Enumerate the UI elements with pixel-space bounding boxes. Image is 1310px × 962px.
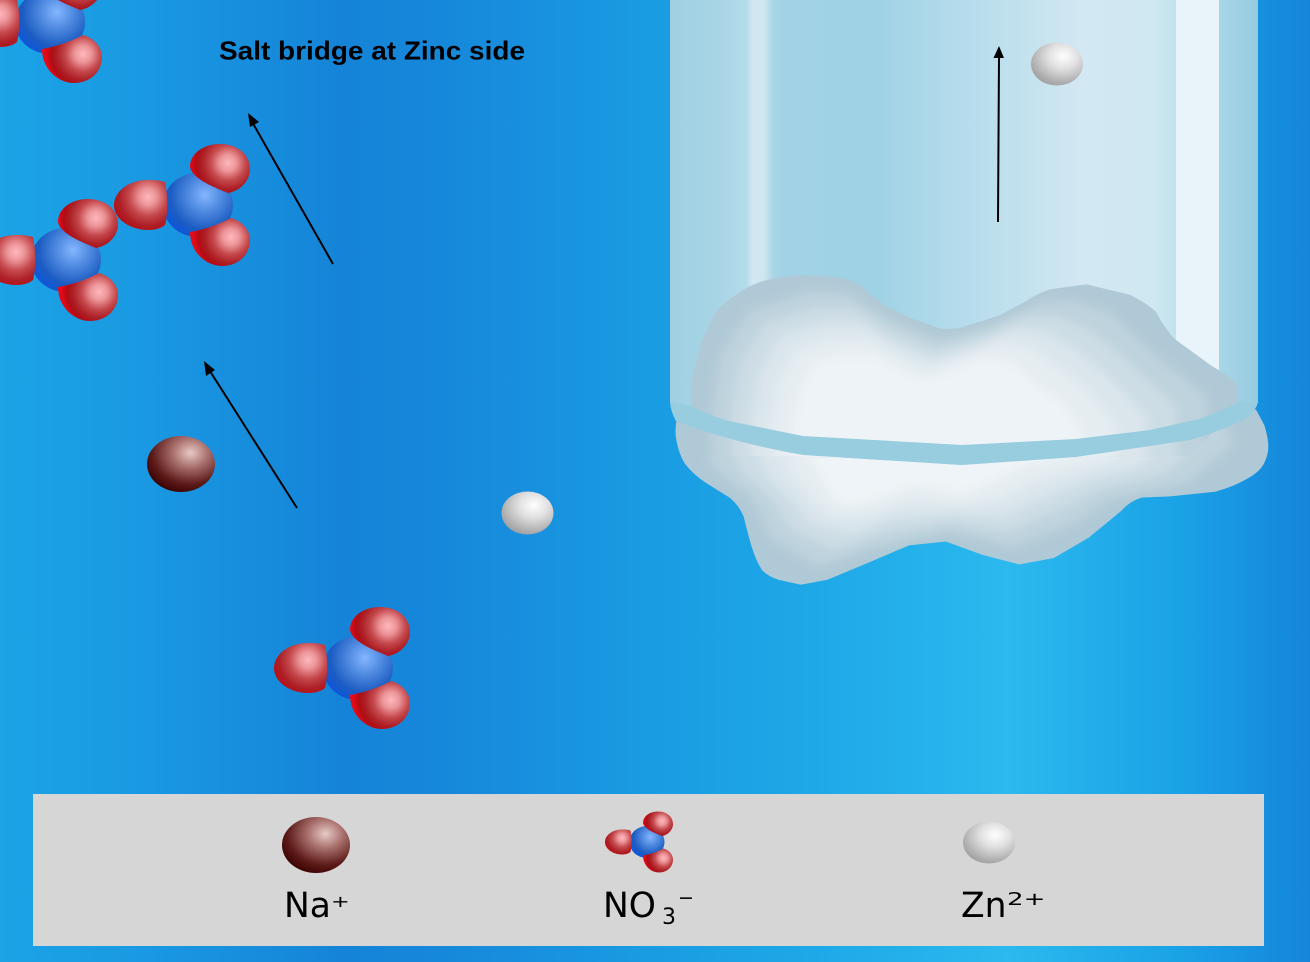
nitrate ion: bottom bbox=[274, 607, 410, 729]
legend label: Na+: + bbox=[331, 892, 350, 911]
legend label: Zn2+: Zn bbox=[961, 886, 1007, 926]
zinc ion: in solution bbox=[502, 492, 554, 534]
legend label: NO3-: − bbox=[678, 887, 694, 909]
zinc ion: in tube bbox=[1031, 42, 1083, 86]
salt bridge plug: upper gel bbox=[691, 275, 1238, 458]
legend label: Na+: Na bbox=[284, 886, 331, 926]
sodium ion bbox=[147, 436, 215, 492]
legend label: NO3- bbox=[603, 886, 694, 930]
legend icon: sodium ion bbox=[282, 817, 350, 873]
salt bridge plug: lower gel bbox=[676, 410, 1268, 585]
legend label: Zn2+: 2+ bbox=[1007, 889, 1045, 910]
arrow: lower left bbox=[204, 361, 297, 508]
arrow: inside tube bbox=[994, 46, 1004, 222]
title: Salt bridge at Zinc side bbox=[219, 36, 525, 66]
legend panel bbox=[33, 794, 1264, 946]
legend label: Zn2+ bbox=[961, 886, 1045, 926]
legend label: NO3-: NO bbox=[603, 886, 656, 926]
nitrate ion: top left, partly cropped bbox=[0, 0, 102, 83]
nitrate ion: left bbox=[0, 199, 118, 321]
legend icon: nitrate ion bbox=[605, 812, 673, 872]
legend label: NO3-: 3 bbox=[662, 905, 676, 930]
legend icon: zinc ion bbox=[963, 822, 1015, 864]
glass tube bbox=[670, 0, 1258, 465]
nitrate ion: upper bbox=[114, 144, 250, 266]
glass tube rim bbox=[670, 402, 1258, 465]
arrow: upper left bbox=[248, 113, 333, 264]
